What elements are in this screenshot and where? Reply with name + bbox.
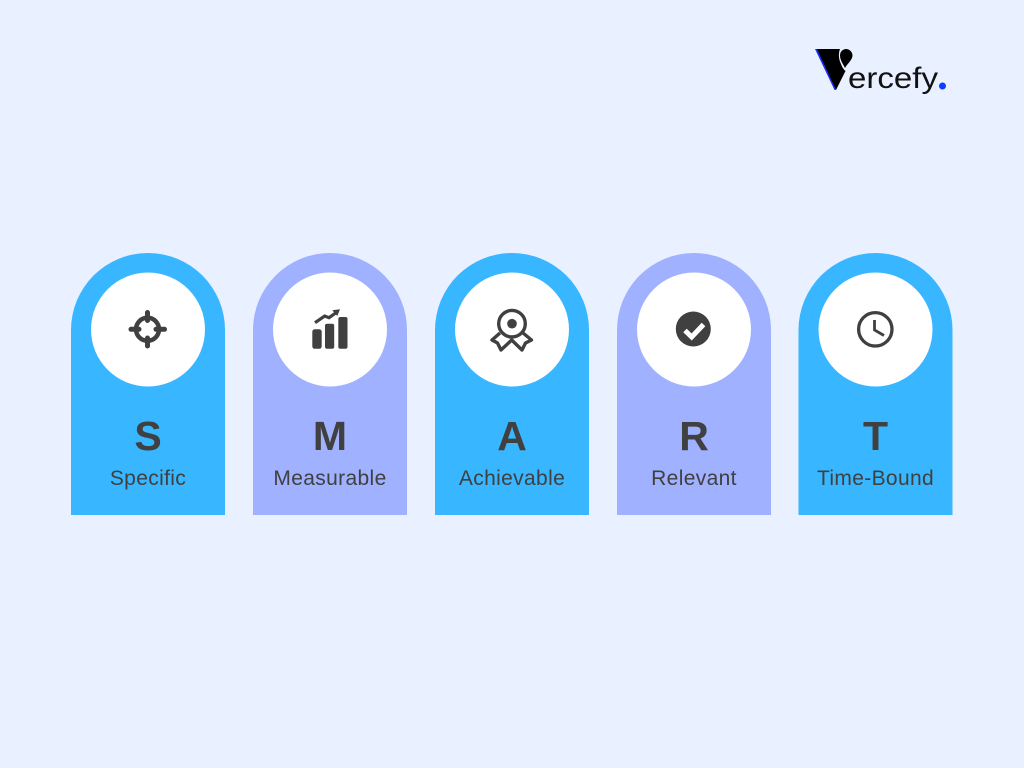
icon: clock	[859, 313, 892, 346]
panel: T Time-Bound	[798, 253, 952, 515]
panel: R Relevant	[617, 253, 771, 515]
letter M: M	[313, 413, 347, 459]
icon: award ribbon	[492, 310, 532, 350]
icon: check badge	[676, 312, 711, 346]
label Specific: Specific	[110, 467, 186, 490]
icon: target crosshair	[131, 312, 164, 346]
panel: A Achievable	[435, 253, 589, 515]
label Achievable: Achievable	[459, 467, 565, 490]
letter A: A	[497, 413, 527, 459]
panel: S Specific	[71, 253, 225, 515]
letter T: T	[863, 413, 888, 459]
label Relevant: Relevant	[651, 467, 737, 490]
logo: Vercefy: ercefy	[848, 62, 938, 95]
logo: Vercefy	[815, 49, 946, 95]
icon: rising bar chart	[312, 309, 348, 349]
label Time-Bound: Time-Bound	[817, 467, 934, 490]
label Measurable: Measurable	[273, 467, 387, 490]
letter R: R	[679, 413, 709, 459]
panel: M Measurable	[253, 253, 407, 515]
letter S: S	[134, 413, 162, 459]
